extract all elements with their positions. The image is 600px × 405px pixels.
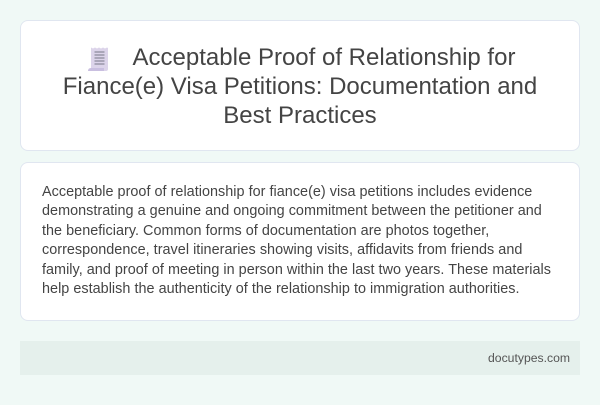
panel: title card	[20, 20, 580, 151]
description text	[42, 184, 551, 297]
panel: description card	[20, 162, 580, 321]
title: Best Practices	[223, 102, 377, 129]
description text: Acceptable proof of relationship for fiance(e) visa petitions includes evidence	[42, 184, 532, 200]
title: Fiance(e) Visa Petitions: Documentation and	[63, 73, 537, 100]
description text: help establish the authenticity of the relationship to immigration authorities.	[42, 281, 520, 297]
description text: the beneficiary. Common forms of documentation are photos together,	[42, 223, 489, 239]
title: Acceptable Proof of Relationship for	[133, 44, 515, 71]
description text: demonstrating a genuine and ongoing commitment between the petitioner and	[42, 203, 542, 219]
description text: correspondence, travel itineraries showing visits, affidavits from friends and	[42, 242, 522, 258]
icon: document scroll	[88, 48, 108, 71]
title	[63, 44, 537, 129]
footer source text: docutypes.com	[488, 351, 570, 365]
footer bar	[20, 341, 580, 375]
description text: family, and proof of meeting in person within the last two years. These materials	[42, 262, 551, 278]
